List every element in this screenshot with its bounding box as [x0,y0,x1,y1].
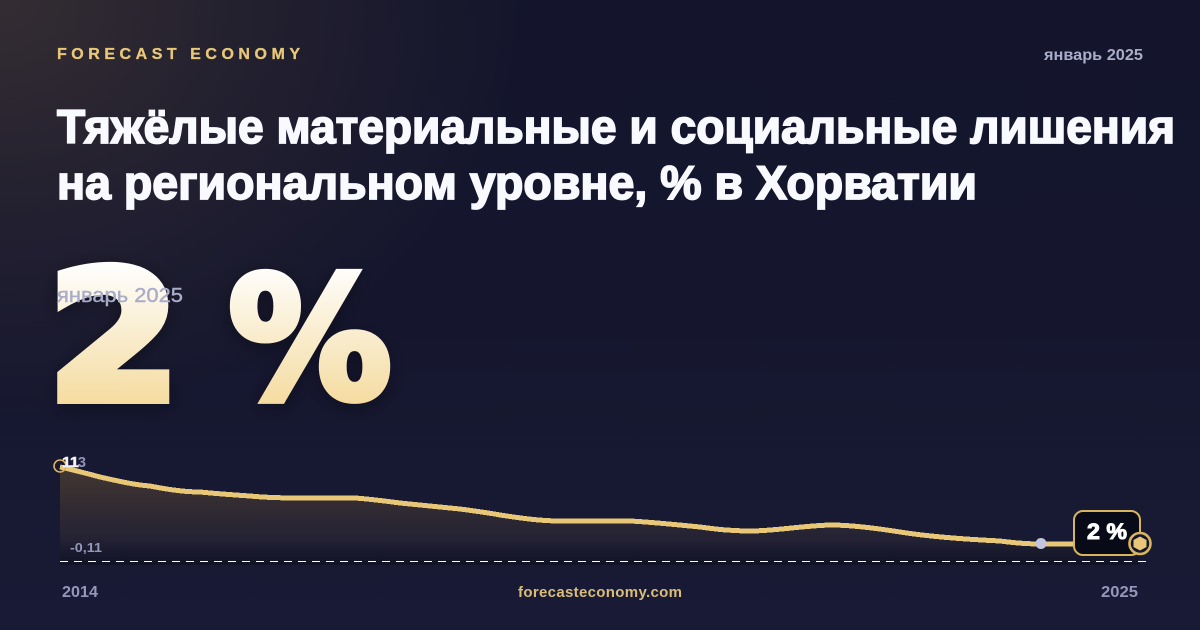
end marker [1130,533,1150,554]
value callout: 2 % [1087,519,1127,544]
start year: 2014 [62,584,98,601]
big value: 2 [48,234,180,441]
chart area fill [60,467,1140,565]
start marker [54,460,66,472]
point marker [1036,538,1046,549]
source url: forecasteconomy.com [518,584,682,601]
value callout [1074,511,1140,555]
line chart [54,454,1150,565]
baseline [60,560,1148,562]
max label: 113 [62,454,86,471]
title: на региональном уровне, % в Хорватии [57,156,977,209]
data line [60,467,1140,544]
brand label: FORECAST ECONOMY [57,46,300,63]
end year: 2025 [1101,584,1138,601]
title: Тяжёлые материальные и социальные лишения [57,100,1175,153]
date label over big value: январь 2025 [57,285,183,307]
date label top right: январь 2025 [1044,47,1143,64]
min label: -0,11 [70,540,102,555]
max label: 11 [62,454,79,471]
title [57,100,1175,209]
big value [48,234,392,441]
big value: % [228,242,392,438]
